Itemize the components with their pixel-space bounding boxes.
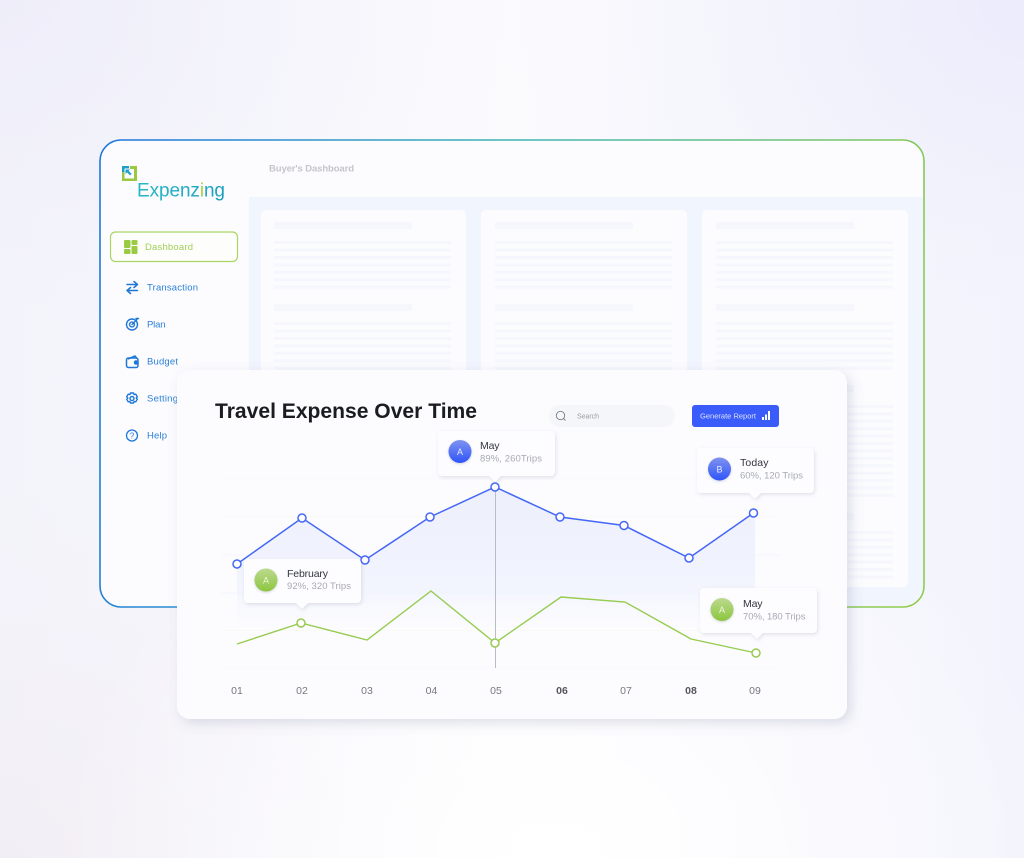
callout: May blue [438, 431, 555, 482]
callout detail: 60%, 120 Trips [740, 470, 803, 482]
x axis labels: 02 [296, 685, 308, 697]
icon: search [556, 411, 566, 420]
nav: help [126, 430, 167, 442]
icon: dashboard grid [124, 240, 138, 254]
callout title: May [743, 598, 763, 610]
avatar: A [719, 605, 725, 615]
icon: gear [127, 393, 137, 403]
nav: budget [126, 356, 178, 368]
x axis labels: 08 [685, 685, 697, 697]
series: green [237, 591, 756, 653]
panel: content area [249, 197, 923, 606]
nav: plan [126, 318, 166, 330]
avatar: B [716, 464, 723, 474]
callout title: Today [740, 457, 769, 469]
nav label: Plan [147, 320, 166, 330]
panel: card 3 [702, 210, 908, 587]
area under blue series [237, 487, 755, 632]
icon: wallet [126, 356, 138, 368]
icon: logo mark [122, 166, 137, 181]
panel: travel expense chart card [177, 370, 847, 719]
callout detail: 89%, 260Trips [480, 454, 542, 464]
callout: Today blue [697, 448, 814, 499]
panel: card 2 [481, 210, 687, 587]
avatar: A [263, 576, 269, 586]
callout title: May [480, 440, 500, 452]
icon: bars [762, 411, 770, 420]
nav label: Budget [147, 356, 178, 368]
marker line [494, 487, 496, 668]
callout detail: 70%, 180 Trips [743, 612, 806, 622]
x axis labels: 05 [490, 685, 502, 697]
x axis labels: 09 [749, 685, 761, 697]
x axis labels: 07 [620, 685, 632, 697]
icon: arrows [127, 282, 138, 294]
nav label: Setting [147, 394, 178, 404]
x axis labels: 06 [556, 685, 568, 697]
panel: dashboard frame [100, 140, 924, 607]
callout title: February [287, 568, 329, 580]
icon: help: ? [130, 432, 135, 440]
nav: dashboard active [110, 232, 238, 262]
x axis labels: 01 [231, 685, 243, 697]
x axis labels: 03 [361, 685, 373, 697]
button: generate report [692, 405, 779, 427]
x axis labels [231, 685, 761, 697]
logo [122, 166, 225, 202]
page heading: Buyer's Dashboard [269, 164, 354, 174]
x axis labels: 04 [426, 685, 437, 697]
nav: setting [127, 393, 178, 404]
callout: February green [244, 559, 361, 609]
title: Travel Expense Over Time [215, 399, 477, 423]
avatar: A [457, 447, 463, 457]
blue markers [233, 483, 758, 568]
callout: May green [700, 588, 817, 639]
series: blue [237, 487, 754, 564]
line chart [222, 479, 780, 668]
green markers [297, 619, 760, 657]
nav label: Transaction [147, 282, 198, 294]
nav: transaction [127, 282, 198, 294]
icon: target [126, 318, 138, 330]
button label: Generate Report [700, 412, 757, 420]
search box [549, 405, 675, 427]
panel: card 1 [261, 210, 466, 587]
callout detail: 92%, 320 Trips [287, 581, 351, 592]
nav label: Help [147, 430, 167, 442]
wordmark: Expenzing [137, 180, 225, 202]
search placeholder: Search [577, 414, 599, 420]
grid lines [222, 479, 780, 668]
nav label: Dashboard [145, 242, 193, 253]
